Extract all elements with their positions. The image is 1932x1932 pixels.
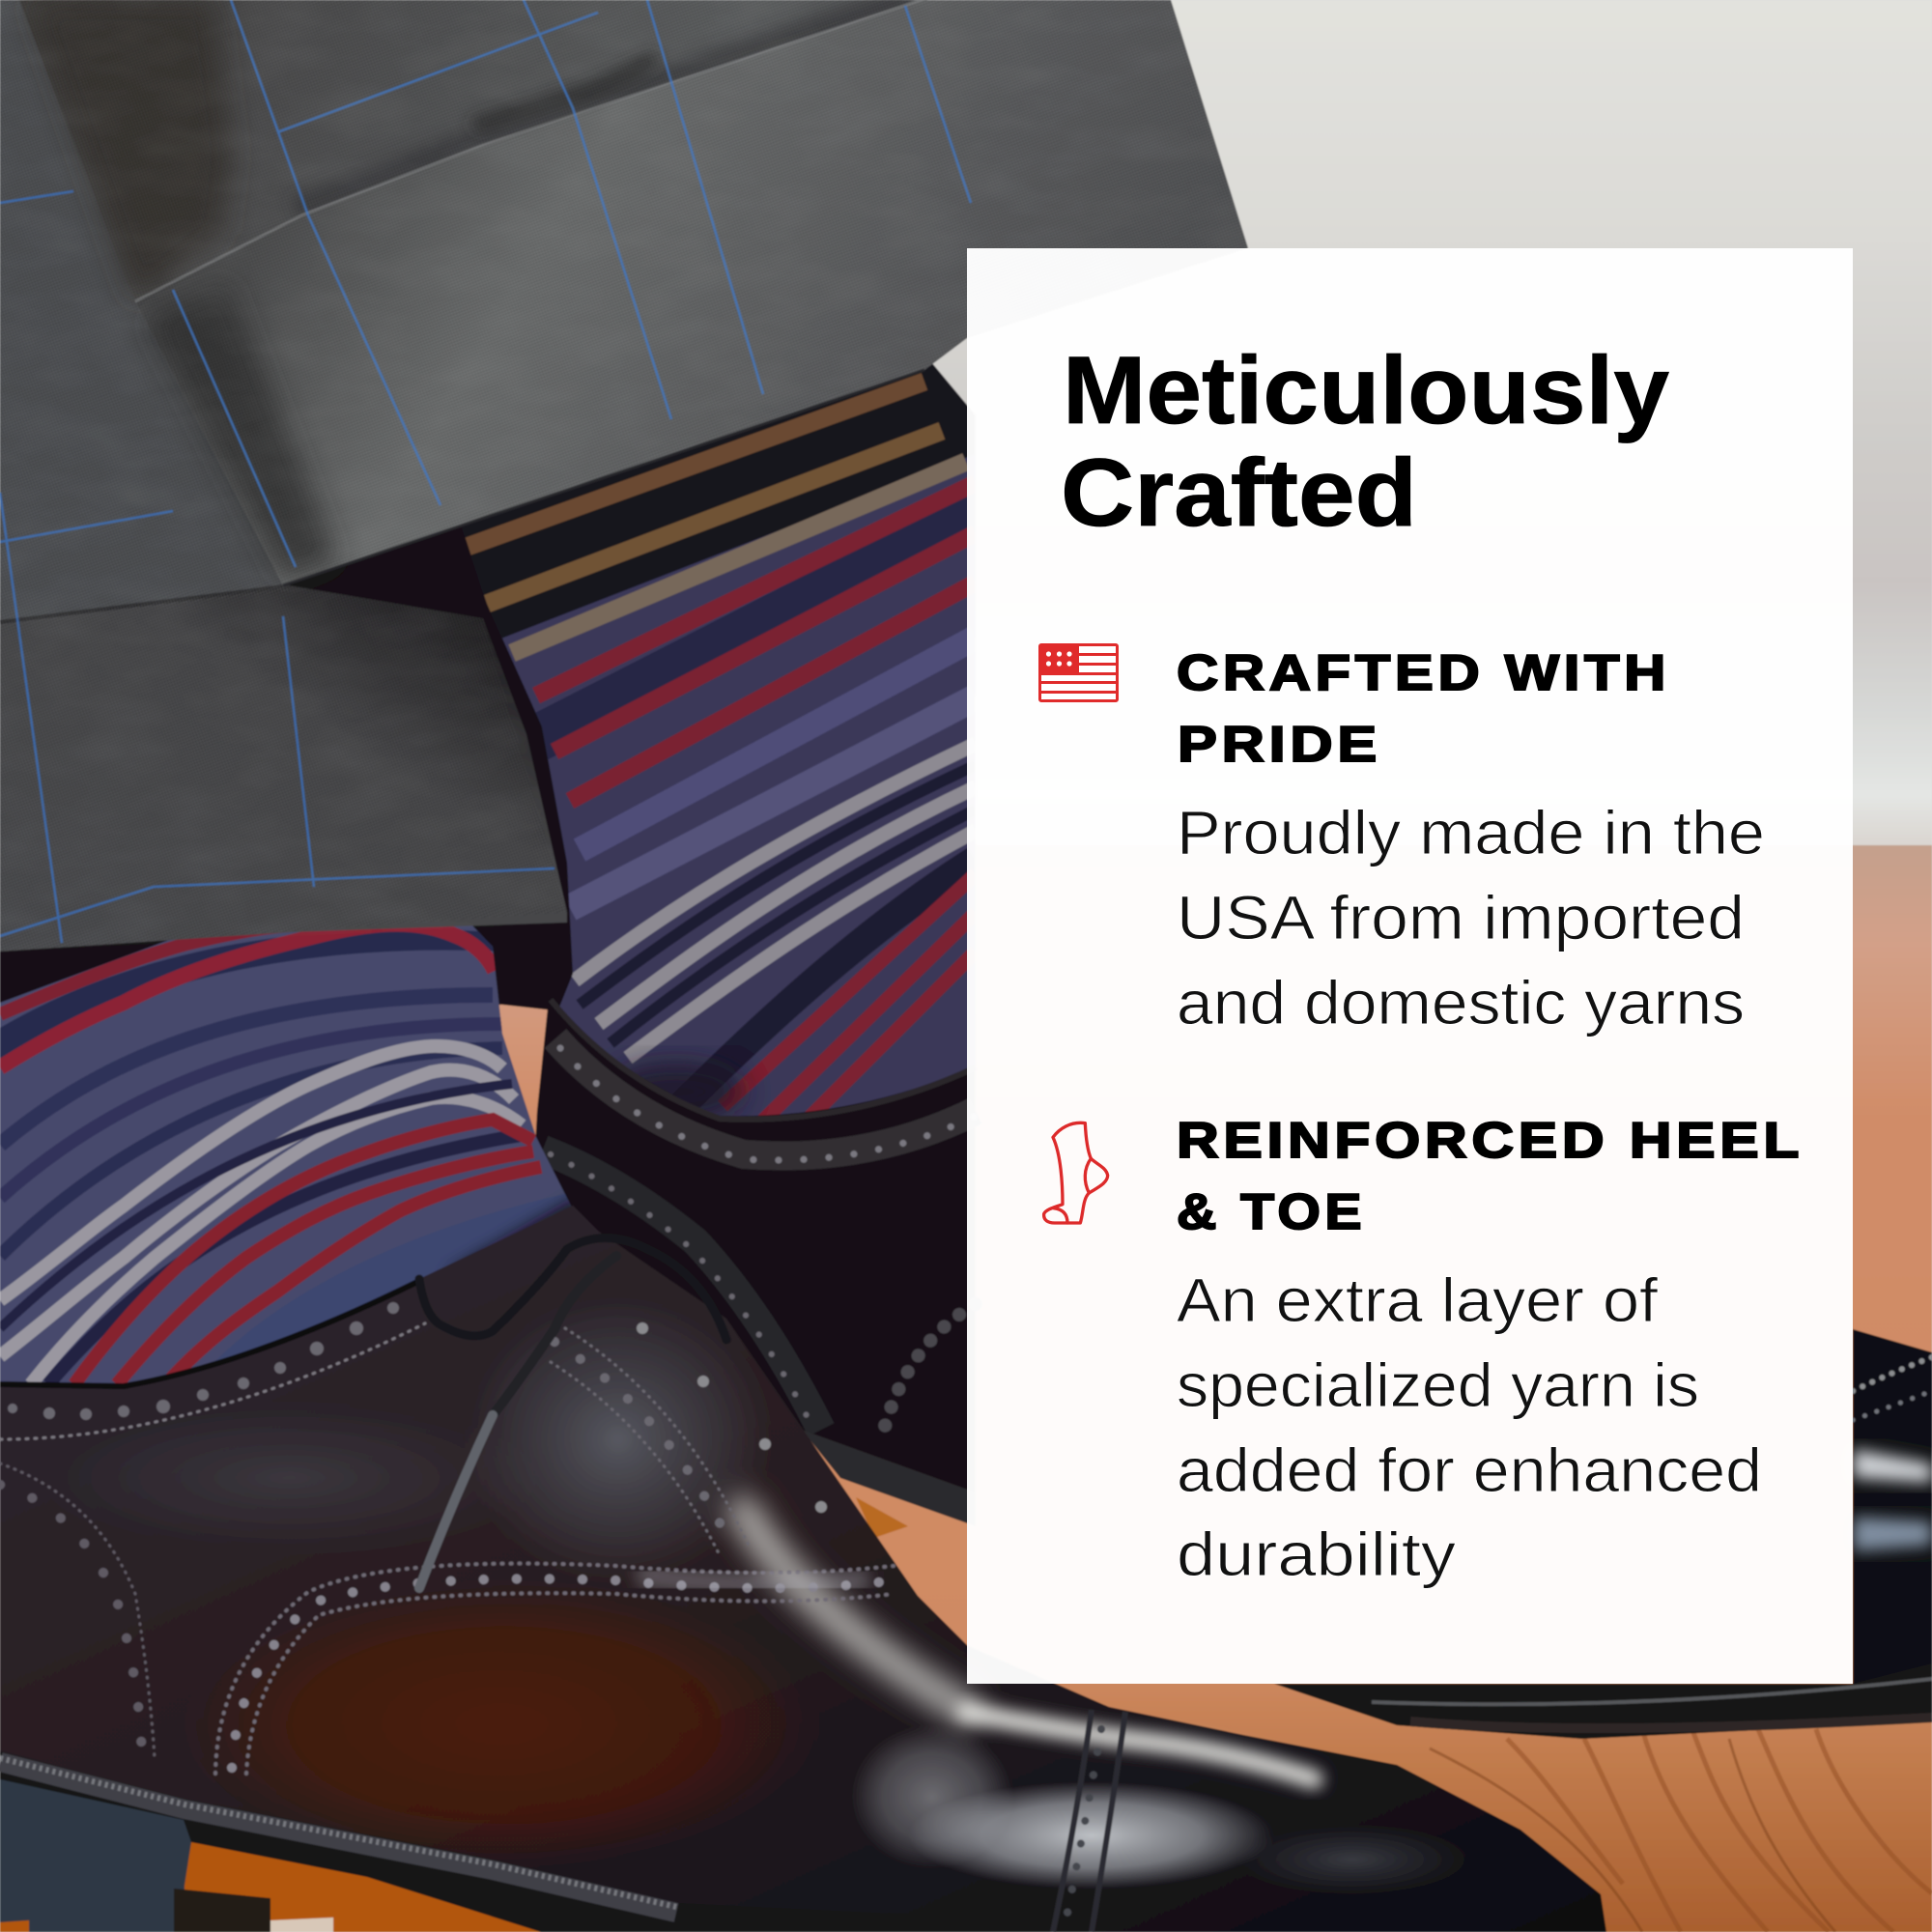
feature heading: crafted with pride: CRAFTED WITH — [1177, 645, 1670, 701]
wood floor — [0, 845, 1932, 1932]
back shoe upper — [531, 998, 976, 1538]
feature text: extra layer of yarn: An extra layer of — [1177, 1265, 1658, 1335]
title: Crafted — [1061, 439, 1417, 546]
reddish brown reflection on shoe — [184, 1579, 821, 1869]
feature text: extra layer of yarn — [1177, 1265, 1762, 1589]
eyelets — [637, 1322, 827, 1513]
shadow under trouser cuffs — [0, 454, 676, 1024]
feature text: made in the USA: and domestic yarns — [1177, 968, 1745, 1037]
feature text: extra layer of yarn: specialized yarn is — [1177, 1350, 1699, 1420]
title — [1061, 336, 1669, 546]
icon: sock with reinforced heel and toe — [1044, 1122, 1108, 1223]
panel: white text card — [967, 248, 1853, 1684]
feature heading: reinforced heel and toe — [1177, 1113, 1804, 1240]
title: Meticulously — [1063, 336, 1669, 443]
icon: american flag — [1039, 644, 1118, 701]
back shoe toe and sole — [1274, 1329, 1932, 1739]
feature heading: crafted with pride: PRIDE — [1178, 717, 1381, 773]
feature heading: reinforced heel and toe: & TOE — [1177, 1184, 1366, 1240]
feature text: made in the USA: USA from imported — [1177, 883, 1745, 952]
trousers: upper leg — [19, 0, 1248, 585]
grey leather sheen on quarter — [464, 1294, 773, 1584]
feature text: extra layer of yarn: durability — [1177, 1520, 1456, 1589]
trousers: lower leg and cuff — [0, 0, 567, 952]
highlight streak on vamp — [744, 1512, 966, 1710]
brogue perforations — [8, 1302, 399, 1420]
toe cap seam — [1053, 1710, 1125, 1932]
wall background — [0, 0, 1932, 855]
feature heading: crafted with pride — [1177, 645, 1670, 773]
feature text: made in the USA: Proudly made in the — [1177, 798, 1765, 867]
front shoe — [0, 1206, 1606, 1932]
feature text: extra layer of yarn: added for enhanced — [1177, 1435, 1762, 1505]
shoe lace — [419, 1238, 726, 1588]
collar stitching — [0, 1323, 425, 1439]
sock: back leg — [462, 363, 967, 1118]
sock: front leg — [0, 925, 572, 1385]
fabric mottling — [15, 101, 560, 952]
feature text: made in the USA — [1177, 798, 1765, 1037]
welt, heel and sole — [0, 1751, 966, 1932]
feature heading: reinforced heel and toe: REINFORCED HEEL — [1177, 1113, 1804, 1169]
